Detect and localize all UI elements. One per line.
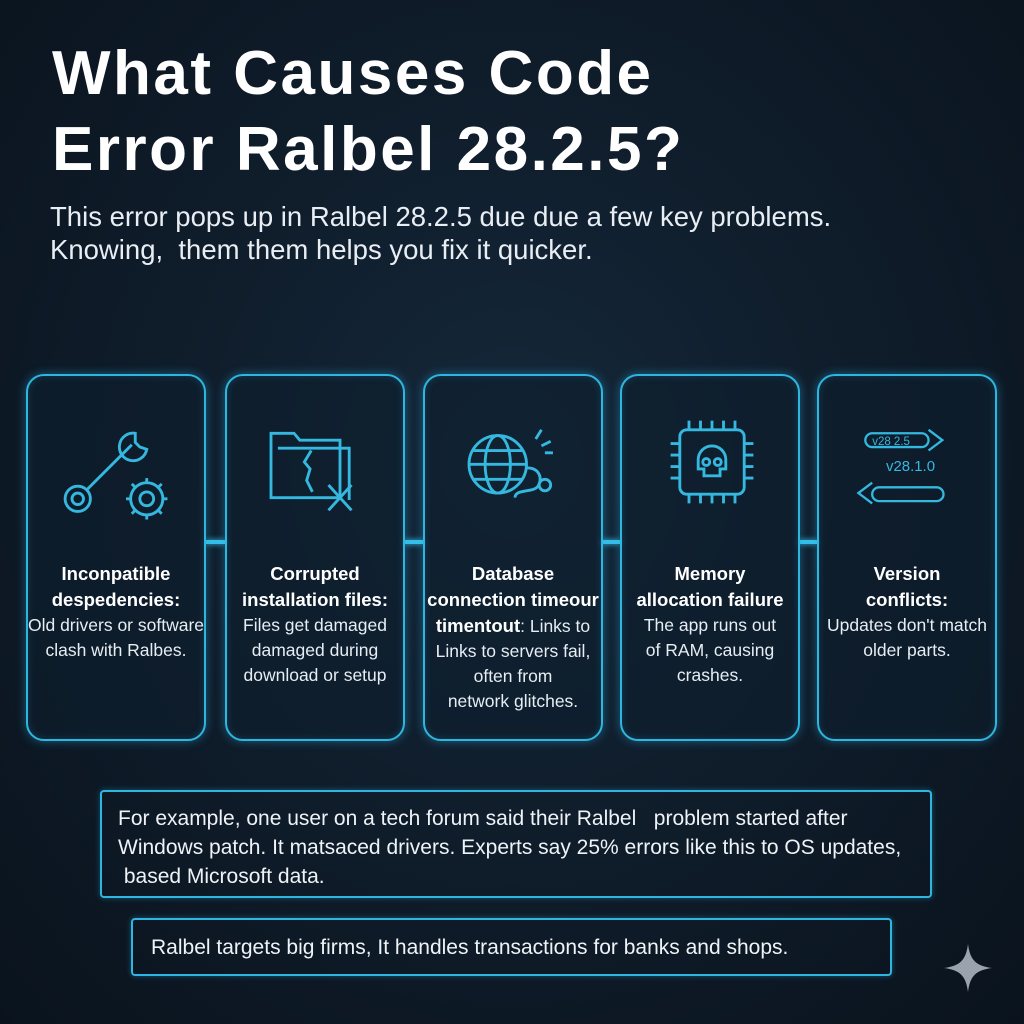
panel: memory allocation failure: allocation failure <box>636 589 784 610</box>
panel: database timeout <box>423 374 603 741</box>
panel: database timeout: Links to servers fail, <box>436 641 590 661</box>
icon: version arrows: v28.1.0 <box>886 458 935 475</box>
panel: corrupted installation files: damaged during <box>252 640 378 660</box>
panel: incompatible dependencies <box>26 374 206 741</box>
icon: version arrows: v28 2.5 <box>872 436 910 448</box>
title: What Causes Code <box>52 39 654 108</box>
callout: forum example: based Microsoft data. <box>124 865 325 888</box>
callout: forum example <box>100 790 932 898</box>
panel: memory allocation failure <box>620 374 800 741</box>
panel: corrupted installation files: download or setup <box>243 665 387 685</box>
icon: version arrows <box>856 428 945 504</box>
panel: memory allocation failure: crashes. <box>677 665 743 685</box>
icon: chip with skull <box>670 420 754 504</box>
title <box>52 39 684 184</box>
panel: version conflicts <box>817 374 997 741</box>
panel: incompatible dependencies: Old drivers or software <box>28 615 204 635</box>
panel: corrupted installation files: installation files: <box>242 589 388 610</box>
panel: database timeout: network glitches. <box>448 691 578 711</box>
panel: corrupted installation files: Files get damaged <box>243 615 387 635</box>
callout: forum example: Windows patch. It matsaced drivers. Experts say 25% errors like this to OS updates, <box>118 836 901 859</box>
panel: memory allocation failure: Memory <box>675 563 745 584</box>
icon: sparkle <box>944 944 992 992</box>
panel: database timeout: often from <box>474 666 552 686</box>
panel: corrupted installation files: Corrupted <box>270 563 360 584</box>
icon: globe with connection <box>468 429 553 498</box>
panel: incompatible dependencies: Inconpatible <box>62 563 170 584</box>
panel: version conflicts: Updates don't match <box>827 615 987 635</box>
panel: version conflicts: older parts. <box>863 640 951 660</box>
subtitle <box>50 201 831 265</box>
panel: memory allocation failure: of RAM, causing <box>646 640 774 660</box>
icon: broken folder <box>270 432 352 512</box>
panel: database timeout: Database <box>472 563 554 584</box>
subtitle: Knowing, them them helps you fix it quicker. <box>50 234 593 265</box>
icon: wrench and gear <box>64 432 168 520</box>
callout: forum example: For example, one user on a tech forum said their Ralbel problem started after <box>118 807 848 830</box>
panel: version conflicts: conflicts: <box>866 589 948 610</box>
callout: target firms <box>131 918 892 976</box>
title: Error Ralbel 28.2.5? <box>52 115 684 184</box>
panel: memory allocation failure: The app runs out <box>644 615 776 635</box>
panel: version conflicts: Version <box>874 563 940 584</box>
panel: incompatible dependencies: despedencies: <box>52 589 180 610</box>
panel: database timeout: timentout: Links to <box>436 615 590 636</box>
panel: incompatible dependencies: clash with Ralbes. <box>45 640 187 660</box>
panel: database timeout: connection timeour <box>427 589 599 610</box>
callout: target firms: Ralbel targets big firms, It handles transactions for banks and shops. <box>151 936 788 959</box>
panel: corrupted installation files <box>225 374 405 741</box>
subtitle: This error pops up in Ralbel 28.2.5 due due a few key problems. <box>50 201 831 232</box>
